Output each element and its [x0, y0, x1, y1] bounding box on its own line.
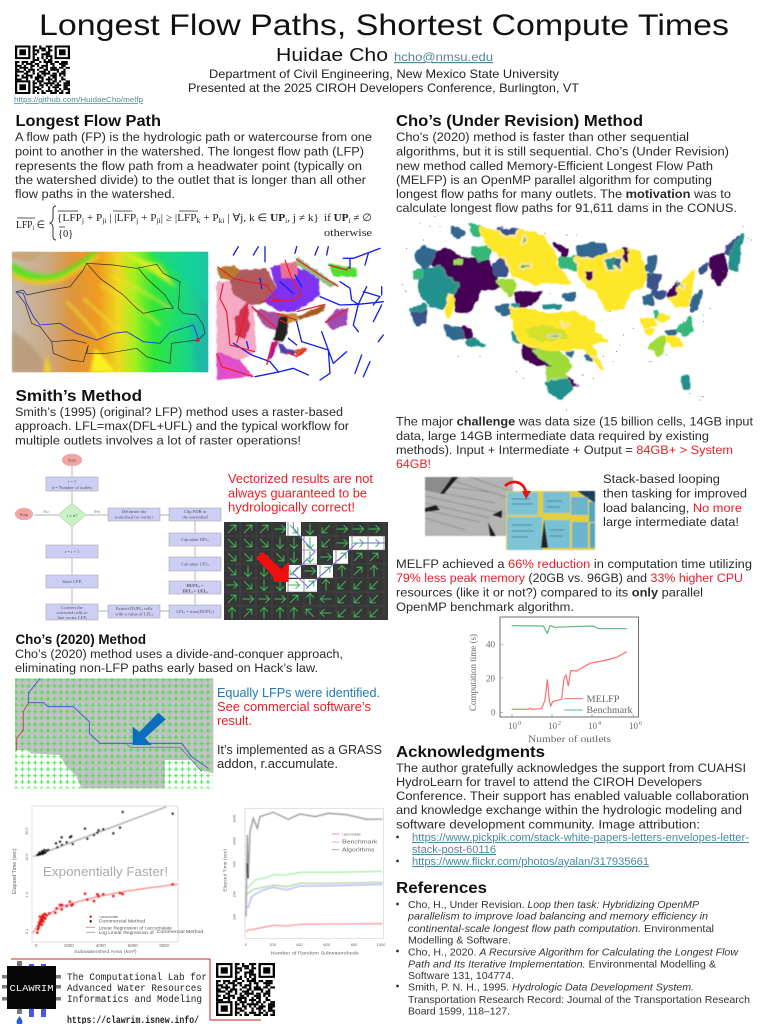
flowchart: Smith's workflow: Convert the	[61, 605, 83, 610]
heading: Acknowledgments: Acknowledgments	[396, 744, 545, 761]
legend: Commercial Method	[157, 929, 204, 934]
callout: results comparison note	[217, 686, 382, 771]
chart: elapsed time vs number of subwatersheds: 200	[269, 942, 277, 947]
text: Cho's 2020 description	[15, 647, 343, 675]
text: lab name	[67, 972, 207, 1024]
heading: Smith's Method: Smith’s Method	[16, 388, 142, 405]
list: references: Cho, H., Under Revision. Loop then task: Hybridizing OpenMP	[408, 900, 699, 911]
chart: elapsed time vs subwatershed area: 1.0	[25, 892, 29, 897]
chart: elapsed time vs number of subwatersheds: 800	[351, 942, 358, 947]
affiliation: Department of Civil Engineering, New Mexico State University	[209, 67, 559, 81]
photo: stack of white papers	[425, 477, 513, 536]
text: lab name: The Computational Lab for	[67, 972, 207, 984]
text: acknowledgments: Conference. Their support has enabled valuable collaboration	[396, 789, 749, 803]
heading: References: References	[396, 880, 487, 897]
equation: LFP definition: UP	[270, 213, 286, 224]
chart: elapsed time vs subwatershed area: 0	[35, 943, 38, 948]
equation: LFP definition: LFP	[16, 220, 34, 231]
flowchart: Smith's workflow: n = Number of outlets	[52, 485, 93, 490]
heading: Cho's (2020) Method: Cho’s (2020) Method	[16, 632, 146, 647]
icon: QR code to repository	[15, 46, 70, 94]
equation: LFP definition: | |LFP	[106, 213, 136, 224]
text: MELFP introduction: new method called Memory-Efficient Longest Flow Path	[396, 159, 713, 173]
equation: LFP definition: j	[135, 217, 138, 225]
list: references: Software 131, 104774.	[408, 971, 514, 982]
chart: elapsed time vs number of subwatersheds: 600	[323, 942, 331, 947]
equation: LFP definition: | ≥ |LFP	[161, 213, 197, 224]
chart: computation time vs number of outlets: Number of outlets	[528, 734, 612, 744]
chart: computation time vs number of outlets: MELFP	[586, 694, 620, 704]
text: MELFP results: resources (like it or not?) compared to its only parallel	[396, 586, 703, 600]
legend: r.accumulate	[99, 915, 118, 919]
map: equally long flow paths on raster	[15, 678, 213, 789]
chart: elapsed time vs number of subwatersheds: 0	[245, 942, 248, 947]
chart: elapsed time vs number of subwatersheds	[223, 808, 386, 956]
text: MELFP introduction	[396, 130, 737, 215]
diagram: flow direction raster grid	[224, 522, 388, 620]
legend: Commercial Method	[99, 919, 146, 924]
text: acknowledgments	[396, 761, 749, 832]
text: longest flow path definition: point to another in the watershed. The longest flow path (LFP)	[15, 144, 364, 158]
arrow: blue pointer	[133, 713, 166, 745]
text: longest flow path definition	[15, 130, 372, 201]
equation: LFP definition: ≠ ∅	[351, 213, 372, 224]
equation: LFP definition: {LFP	[57, 213, 80, 224]
flowchart: Smith's workflow: line vector LFPᵢ	[57, 615, 87, 620]
text: Cho's 2020 description: Cho’s (2020) method uses a divide-and-conquer approach,	[15, 647, 343, 661]
text: longest flow path definition: represents the flow path from a headwater point (typically on	[15, 159, 362, 173]
text: stack-based looping note: large intermediate data!	[603, 515, 739, 529]
map: elevation with longest flow path	[12, 252, 208, 372]
chart: computation time vs number of outlets: 40	[486, 640, 496, 650]
text: data size challenge	[396, 414, 754, 471]
chart: elapsed time vs number of subwatersheds: 100	[232, 914, 236, 920]
chart: elapsed time vs subwatershed area: 8000	[159, 943, 170, 948]
icon: CLAWRIM chip	[2, 961, 61, 1024]
chart: elapsed time vs subwatershed area: 0.1	[25, 929, 29, 934]
chart: computation time vs number of outlets: Computation time (s)	[468, 634, 478, 711]
chart: computation time vs number of outlets: 10	[588, 721, 598, 731]
flowchart: Smith's workflow: Stop	[20, 512, 29, 517]
chart: computation time vs number of outlets: 10	[548, 721, 558, 731]
legend	[332, 833, 378, 853]
flowchart: Smith's workflow: extracted cells to	[56, 610, 88, 615]
flowchart: Smith's workflow: DUFLᵢ =	[186, 583, 204, 588]
list: references: Transportation Research Record: Journal of the Transportation Research	[408, 995, 750, 1006]
list: references: Cho, H., 2020. A Recursive Algorithm for Calculating the Longest Flow	[408, 948, 740, 958]
chart: computation time vs number of outlets: 0	[518, 721, 521, 727]
list: references: Modelling & Software.	[408, 936, 511, 946]
equation: LFP definition: i	[285, 217, 287, 225]
icon: CLAWRIM chip: CLAWRIM	[10, 983, 54, 994]
photo: sticky notes on a board	[506, 491, 595, 550]
equation: LFP definition: ji	[155, 217, 161, 225]
list: references: Board 1599, 118–127.	[408, 1006, 510, 1018]
author and email: hcho@nmsu.edu	[394, 50, 493, 64]
label: exponentially faster: Exponentially Faster!	[43, 864, 168, 879]
chart: computation time vs number of outlets: 2	[558, 721, 561, 727]
flowchart: Smith's workflow: i = 1	[68, 479, 77, 484]
chart: elapsed time vs subwatershed area: Elapsed Time (sec)	[12, 848, 18, 894]
arrow: red pointer	[256, 552, 289, 582]
chart: elapsed time vs subwatershed area: 10.0	[25, 854, 29, 861]
heading: Cho's (Under Revision) Method: Cho’s (Under Revision) Method	[396, 113, 643, 130]
heading: Longest Flow Path: Longest Flow Path	[16, 113, 161, 130]
equation: LFP definition: ji	[101, 217, 107, 225]
text: Cho's 2020 description: eliminating non-LFP paths early based on Hack’s law.	[15, 661, 318, 675]
list: references: Smith, P. N. H., 1995. Hydrologic Data Development System.	[408, 982, 694, 994]
text: acknowledgments: and knowledge exchange within the hydrologic modeling and	[396, 803, 742, 817]
arrow: red curved arrow	[505, 482, 526, 494]
chart: elapsed time vs subwatershed area: 50.0	[25, 828, 29, 835]
callout: vectorized results warning: hydrologically correct!	[228, 500, 355, 514]
flowchart: Smith's workflow	[15, 454, 221, 620]
list: image attribution links: https://www.flickr.com/photos/ayalan/317935661	[412, 856, 649, 868]
chart: computation time vs number of outlets: 4	[598, 721, 601, 727]
legend: Benchmark	[342, 839, 378, 845]
callout: vectorized results warning: Vectorized results are not	[228, 472, 374, 486]
chart: computation time vs number of outlets: 10	[508, 721, 518, 731]
text: MELFP introduction: (MELFP) is an OpenMP parallel algorithm for computing	[396, 173, 712, 187]
affiliation	[188, 67, 579, 95]
map: subwatershed longest flow paths	[217, 247, 383, 380]
equation: LFP definition: + P	[84, 213, 102, 224]
text: data size challenge: methods). Input + Intermediate + Output = 84GB+ > System	[396, 443, 733, 457]
chart: elapsed time vs number of subwatersheds: 1000	[377, 942, 386, 947]
text: acknowledgments: The author gratefully acknowledges the support from CUAHSI	[396, 761, 746, 775]
equation: LFP definition: if UP	[324, 213, 348, 224]
legend: Linear Regression of r.accumulate	[99, 925, 173, 930]
logo: CLAWRIM lab block	[2, 959, 275, 1024]
legend: Algorithms	[342, 847, 375, 853]
text: lab name: Informatics and Modeling	[67, 994, 202, 1006]
chart: elapsed time vs subwatershed area: Subwatershed Area (km²)	[74, 949, 137, 955]
chart: computation time vs number of outlets	[468, 617, 642, 744]
chart: elapsed time vs number of subwatersheds: 500	[232, 861, 236, 867]
text: longest flow path definition: A flow path (FP) is the hydrologic path or watercourse from one	[15, 130, 372, 144]
equation: LFP definition: otherwise	[324, 228, 372, 239]
repository link: https://github.com/HuidaeCho/melfp	[14, 95, 143, 104]
callout: vectorized results warning: always guaranteed to be	[228, 486, 367, 500]
text: MELFP introduction: algorithms, but it is still sequential. Cho’s (Under Revision)	[396, 144, 729, 158]
map: CONUS longest flow path subwatersheds	[403, 217, 752, 410]
flowchart: Smith's workflow: LFLᵢ = max(DUFLᵢ)	[176, 609, 214, 614]
author and email	[276, 45, 493, 65]
equation: LFP definition: k	[197, 217, 201, 225]
flowchart: Smith's workflow: Delineate the	[122, 509, 146, 514]
text: MELFP results: MELFP achieved a 66% reduction in computation time utilizing	[396, 557, 752, 571]
flowchart: Smith's workflow: the watershed	[182, 514, 208, 520]
chart: elapsed time vs subwatershed area: 4000	[96, 943, 106, 948]
legend: r.accumulate	[342, 833, 361, 837]
list: image attribution links	[396, 832, 749, 868]
author and email: Huidae Cho	[276, 45, 388, 65]
text: MELFP results: OpenMP benchmark algorithm.	[396, 600, 574, 614]
text: stack-based looping note: then tasking for improved	[603, 486, 747, 500]
chart: computation time vs number of outlets: 10	[629, 721, 638, 731]
flowchart: Smith's workflow: Store LFPᵢ	[62, 579, 82, 584]
flowchart: Smith's workflow: watershed for outlet i	[114, 514, 154, 520]
flowchart: Smith's workflow: Start	[68, 458, 77, 462]
chart: elapsed time vs subwatershed area: 2000	[64, 943, 74, 948]
equation: LFP definition: + P	[138, 213, 157, 224]
flowchart: Smith's workflow: i ≤ n?	[67, 513, 77, 518]
text: MELFP results	[396, 557, 752, 614]
equation: LFP definition: i	[32, 224, 34, 232]
text: MELFP introduction: Cho’s (2020) method is faster than other sequential	[396, 130, 689, 144]
chart: elapsed time vs number of subwatersheds: Number of Random Subwatersheds	[271, 950, 359, 956]
text: stack-based looping note: load balancing, No more	[603, 501, 742, 515]
equation: LFP definition: | ∀j, k ∈	[225, 212, 270, 224]
flowchart: Smith's workflow: with a value of LFLᵢ	[115, 612, 153, 616]
chart: elapsed time vs number of subwatersheds: 200	[232, 891, 236, 897]
text: Smith's method description: multiple outlets involves a lot of raster operations!	[15, 434, 301, 448]
list: references	[396, 900, 750, 1018]
text: stack-based looping note: Stack-based looping	[603, 472, 720, 486]
callout: results comparison note: Equally LFPs were identified.	[217, 686, 380, 700]
text: data size challenge: data, large 14GB intermediate data required by existing	[396, 429, 709, 443]
flowchart: Smith's workflow: Calculate DFLᵢ	[181, 537, 209, 542]
legend: Log Linear Regression of	[99, 930, 155, 935]
title: Longest Flow Paths, Shortest Compute Times	[39, 9, 729, 42]
equation: LFP definition: + P	[200, 213, 219, 224]
callout: results comparison note: It’s implemented as a GRASS	[217, 743, 382, 757]
chart: elapsed time vs number of subwatersheds: Elapsed Time (sec)	[223, 849, 229, 892]
callout: results comparison note: See commercial software’s	[217, 700, 371, 714]
text: acknowledgments: HydroLearn for travel to attend the CIROH Developers	[396, 775, 702, 789]
text: data size challenge: The major challenge was data size (15 billion cells, 14GB input	[396, 414, 754, 428]
photos: paper stack to sticky notes	[425, 477, 595, 550]
callout: results comparison note: addon, r.accumulate.	[217, 757, 338, 771]
text: Smith's method description: Smith’s (1995) (original? LFP) method uses a raster-based	[15, 405, 343, 419]
list: references: Path and Its Iterative Implementation. Environmental Modelling &	[408, 960, 716, 970]
text: MELFP introduction: calculate longest flow paths for 91,611 dams in the CONUS.	[396, 201, 737, 215]
legend	[86, 915, 204, 935]
equation: LFP definition: {0}	[58, 229, 73, 240]
callout: vectorized results warning	[228, 472, 374, 514]
flowchart: Smith's workflow: DFLᵢ + UFLᵢ	[183, 588, 208, 594]
equation: LFP definition: ∈	[34, 220, 45, 231]
equation: LFP definition: , j ≠ k}	[287, 213, 319, 224]
affiliation: Presented at the 2025 CIROH Developers Conference, Burlington, VT	[188, 81, 579, 95]
list: image attribution links: stack-post-60116	[412, 844, 496, 856]
chart: elapsed time vs subwatershed area: 6000	[128, 943, 138, 948]
text: acknowledgments: software development community. Image attribution:	[396, 818, 700, 832]
chart: computation time vs number of outlets: Benchmark	[586, 705, 633, 715]
text: MELFP introduction: longest flow paths for many outlets. The motivation was to	[396, 187, 731, 201]
flowchart: Smith's workflow: i = i + 1	[65, 549, 80, 554]
text: lab name: Advanced Water Resources	[67, 983, 202, 995]
flowchart: Smith's workflow: Extract DUFLᵢ cells	[116, 606, 153, 611]
text: longest flow path definition: flow paths in the watershed.	[15, 187, 175, 201]
chart: elapsed time vs number of subwatersheds: 1000	[232, 837, 236, 845]
chart: computation time vs number of outlets: 6	[639, 721, 642, 727]
flowchart: Smith's workflow: Calculate UFLᵢ	[181, 562, 209, 566]
equation: LFP definition: i	[348, 217, 351, 225]
text: data size challenge: 64GB!	[396, 457, 431, 471]
flowchart: Smith's workflow: Yes	[94, 509, 101, 514]
callout: results comparison note: result.	[217, 714, 252, 728]
list: references: continental-scale longest flow path computation. Environmental	[408, 924, 714, 935]
text: MELFP results: 79% less peak memory (20GB vs. 96GB) and 33% higher CPU	[396, 571, 743, 585]
flowchart: Smith's workflow: No	[43, 509, 50, 514]
text: longest flow path definition: the watershed divide) to the outlet that is longer than all other	[15, 173, 366, 187]
flowchart: Smith's workflow: Clip FDR to	[184, 509, 207, 514]
equation: LFP definition: ki	[219, 217, 225, 225]
text: stack-based looping note	[603, 472, 747, 529]
chart: elapsed time vs subwatershed area	[12, 806, 204, 955]
list: image attribution links: https://www.pickpik.com/stack-white-papers-letters-envelopes-letter-	[412, 832, 749, 844]
chart: computation time vs number of outlets: 0	[491, 708, 496, 718]
list: references: parallelism to improve load balancing and memory efficiency in	[407, 912, 708, 922]
equation: LFP definition	[16, 206, 372, 240]
text: Smith's method description: approach. LFL=max(DFL+UFL) and the typical workflow for	[15, 419, 349, 433]
chart: elapsed time vs number of subwatersheds: 2000	[232, 815, 236, 823]
equation: LFP definition: j	[81, 217, 84, 225]
text: Smith's method description	[15, 405, 349, 448]
chart: elapsed time vs number of subwatersheds: 400	[296, 942, 303, 947]
chart: computation time vs number of outlets: 20	[486, 674, 496, 684]
icon: QR code to lab website	[216, 963, 275, 1016]
